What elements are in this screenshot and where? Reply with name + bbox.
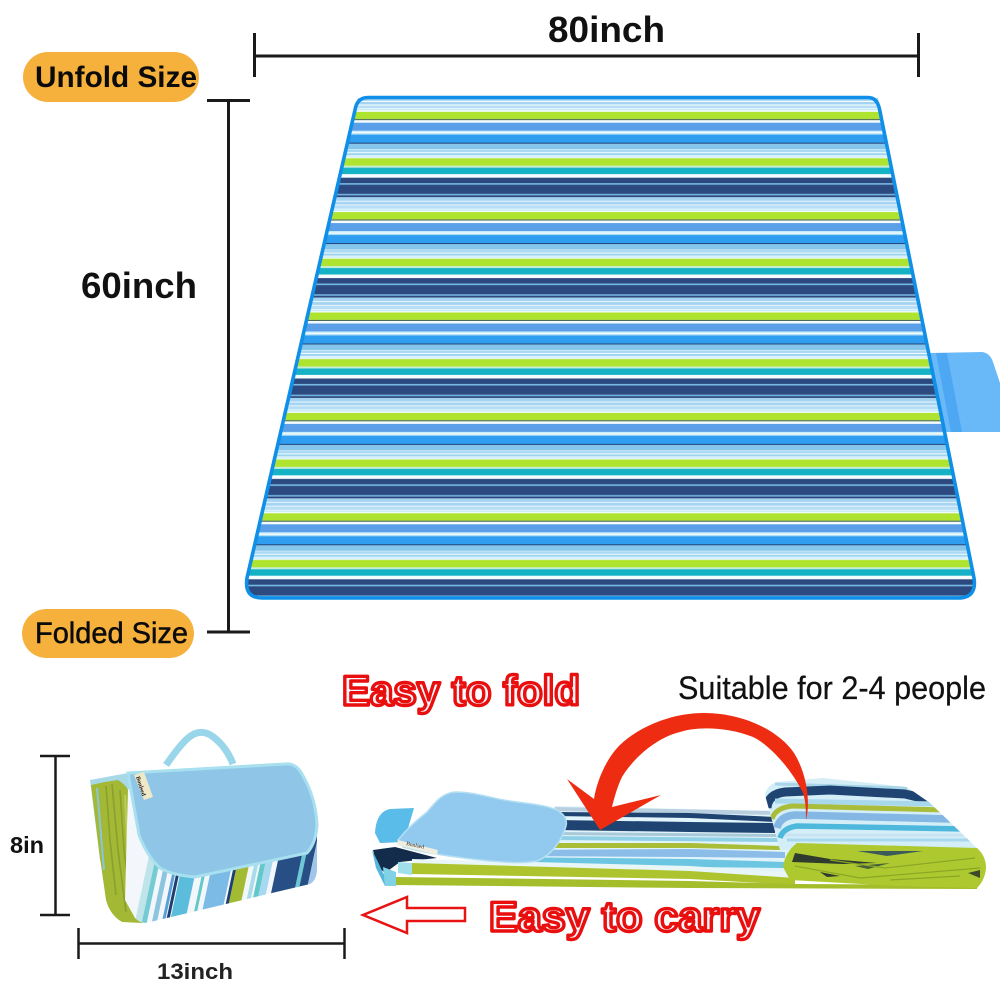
label: Unfold Size (23, 52, 199, 102)
dimension: 13 inch (78, 928, 345, 984)
green fold edge (91, 780, 142, 923)
dimension: 80 inch: 80inch (548, 9, 665, 50)
heading: Easy to carry: Easy to carry (489, 893, 761, 940)
text: Suitable for 2-4 people: Suitable for 2-4 people (678, 670, 986, 706)
dark underside (373, 847, 437, 873)
right folded roll: green folds (783, 843, 986, 888)
mat partly folded photo: Bonlsed (406, 841, 425, 851)
dimension: 13 inch: 13inch (157, 959, 233, 984)
label: Folded Size: Folded Size (35, 617, 188, 650)
label: Folded Size (22, 609, 194, 658)
heading: Easy to fold: Easy to fold (342, 667, 580, 714)
top flap (128, 764, 317, 877)
flap: storage cover on picnic mat (930, 352, 1000, 432)
mat partly folded photo (372, 775, 986, 889)
dimension: 8 in: 8in (10, 832, 44, 858)
green layers bottom (398, 862, 412, 875)
dimension: 8 in (10, 756, 70, 915)
label: Unfold Size: Unfold Size (35, 61, 197, 94)
striped middle (534, 806, 789, 872)
dimension: 60 inch (81, 100, 250, 632)
handle loop (375, 808, 414, 843)
left outer strip (90, 773, 133, 880)
red fold arrow (567, 713, 808, 830)
dimension: 60 inch: 60inch (81, 265, 197, 306)
folded mat photo: Bonlsed (134, 776, 146, 798)
dimension: 80 inch (254, 9, 918, 77)
striped body (125, 790, 317, 923)
folded mat photo (90, 728, 318, 923)
handle (166, 732, 233, 765)
blue flap (398, 792, 566, 863)
red outline arrow (363, 897, 465, 933)
brand tag (134, 772, 153, 800)
picnic mat unfolded with stripes (247, 98, 974, 598)
right folded roll: stripes (765, 778, 977, 850)
brand tag (397, 840, 438, 855)
